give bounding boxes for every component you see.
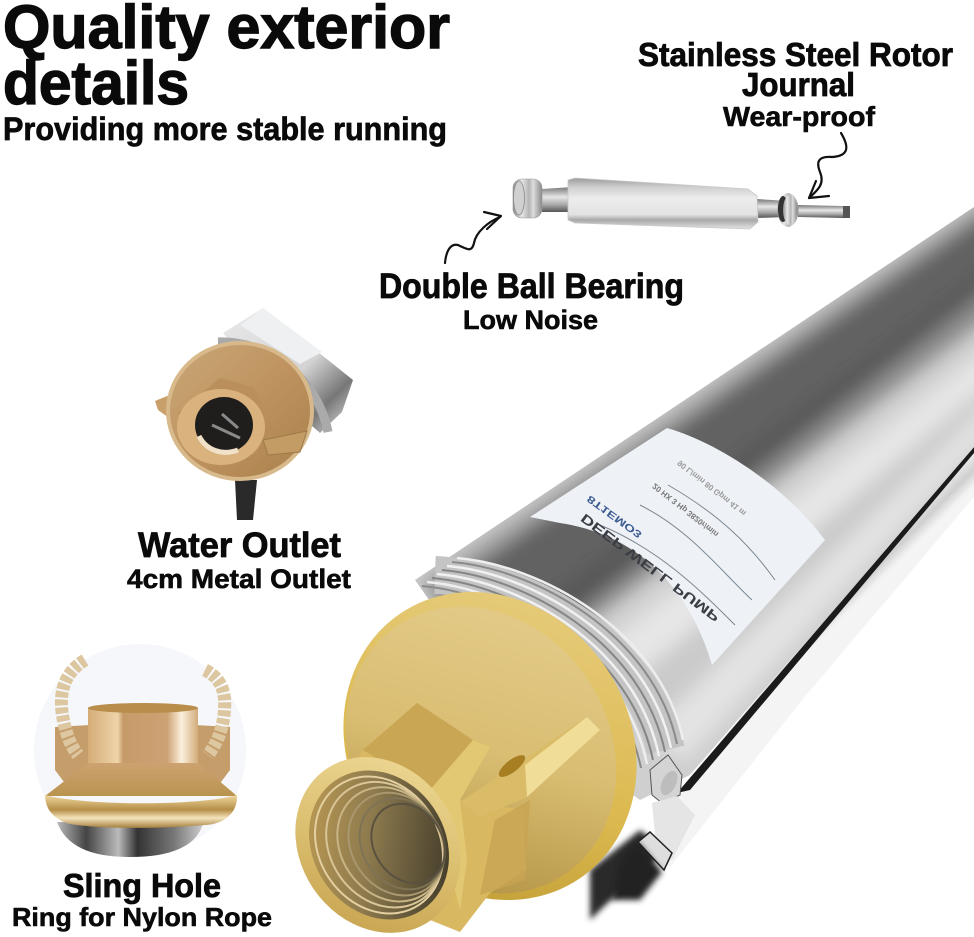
callout: double ball bearing: Low Noise [463, 305, 598, 335]
callout: stainless steel rotor journal: Wear-proof [723, 101, 876, 132]
callout: sling hole: Ring for Nylon Rope [12, 902, 272, 932]
arrow: to rotor journal [809, 133, 846, 198]
callout: double ball bearing: Double Ball Bearing [379, 267, 684, 306]
product label [530, 428, 825, 665]
product label: 20 HX 3 Hp 3820r/min [651, 481, 720, 539]
cable shadow [590, 830, 665, 920]
subtitle: Providing more stable running [3, 111, 447, 147]
clamp and screw [612, 755, 695, 900]
threaded collar [422, 558, 683, 768]
product label: 90 L/min 80 Gpm 41 m [676, 458, 748, 518]
flange lug [460, 717, 600, 817]
outlet hex body [335, 703, 526, 932]
pump: main product illustration [262, 190, 974, 937]
callout: water outlet: Water Outlet [138, 526, 341, 565]
callout: water outlet [127, 526, 351, 594]
callout: stainless steel rotor journal: Journal [742, 66, 855, 103]
product label: 8T1EMO3 [585, 493, 645, 540]
arrow: to double ball bearing [445, 212, 501, 263]
callout: water outlet: 4cm Metal Outlet [127, 564, 351, 594]
pump body [400, 190, 974, 810]
icon: rotor shaft [513, 178, 850, 229]
callout: stainless steel rotor journal [638, 36, 953, 132]
callout: sling hole [12, 867, 272, 932]
cable [235, 480, 257, 520]
title: details [3, 49, 189, 117]
label text: DEEP WELL PUMP [578, 511, 723, 625]
threaded outlet bore [262, 725, 494, 937]
callout: double ball bearing [379, 267, 684, 335]
brass flange [284, 535, 696, 937]
icon: water outlet [155, 308, 353, 520]
callout: sling hole: Sling Hole [63, 867, 221, 904]
title [3, 0, 450, 117]
callout: stainless steel rotor journal: Stainless Steel Rotor [638, 36, 953, 73]
icon: sling hole [34, 644, 246, 857]
cable guard strap [655, 440, 974, 867]
